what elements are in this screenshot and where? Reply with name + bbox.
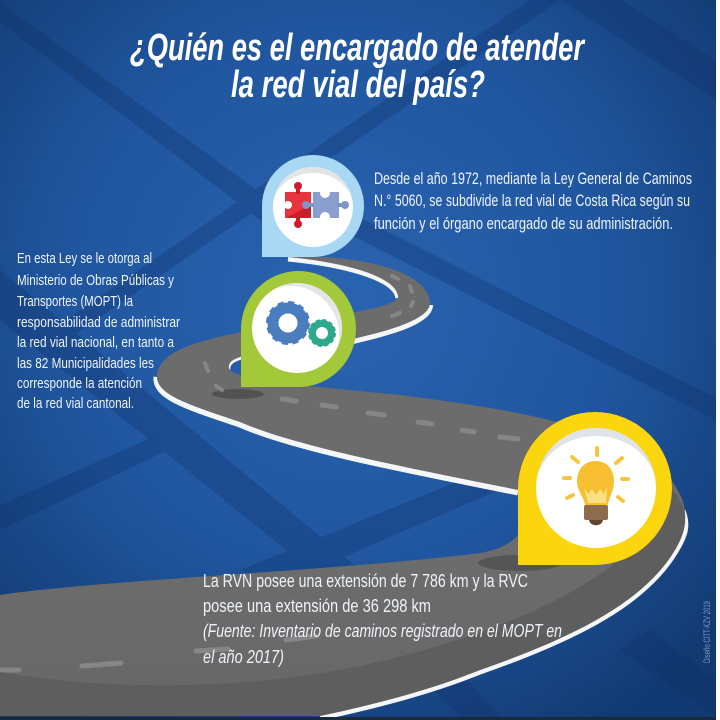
bottom strip	[0, 717, 716, 720]
text block: MOPT: de la red vial cantonal.	[17, 395, 134, 412]
icon: small green gear	[310, 320, 334, 346]
icon: large blue gear	[268, 303, 308, 343]
text block: MOPT: responsabilidad de administrar	[17, 314, 180, 331]
text block: road extension: La RVN posee una extensión de 7 786 km y la RVC	[203, 571, 528, 591]
road	[0, 257, 685, 717]
road shadow under pin	[478, 555, 562, 571]
text block: MOPT	[17, 250, 180, 412]
lane dashes	[2, 276, 518, 670]
icon: puzzle pieces	[284, 182, 349, 228]
credit: Diseño CITT-KZV 2019	[702, 601, 712, 663]
title: la red vial del país?	[231, 64, 485, 106]
icon: bulb	[564, 448, 628, 525]
text block: MOPT: corresponde la atención	[17, 375, 142, 392]
pin: light bulb	[518, 412, 672, 565]
pin: gears	[241, 264, 361, 387]
text block: intro	[374, 170, 692, 233]
title	[130, 27, 586, 106]
road white edges	[157, 259, 685, 717]
road surface	[0, 257, 685, 716]
text block: road extension: el año 2017)	[203, 647, 284, 667]
text block: MOPT: Transportes (MOPT) la	[17, 293, 133, 310]
text block: MOPT: la red vial nacional, en tanto a	[17, 334, 175, 351]
text block: MOPT: las 82 Municipalidades les	[17, 355, 154, 372]
pin: puzzle	[262, 155, 364, 257]
text block: road extension: (Fuente: Inventario de caminos registrado en el MOPT en	[203, 621, 562, 641]
text block: MOPT: En esta Ley se le otorga al	[17, 250, 152, 267]
road darker lower lane	[0, 490, 685, 716]
text block: road extension: posee una extensión de 36 298 km	[203, 596, 431, 616]
text block: road extension	[203, 571, 562, 667]
text block: MOPT: Ministerio de Obras Públicas y	[17, 272, 174, 289]
